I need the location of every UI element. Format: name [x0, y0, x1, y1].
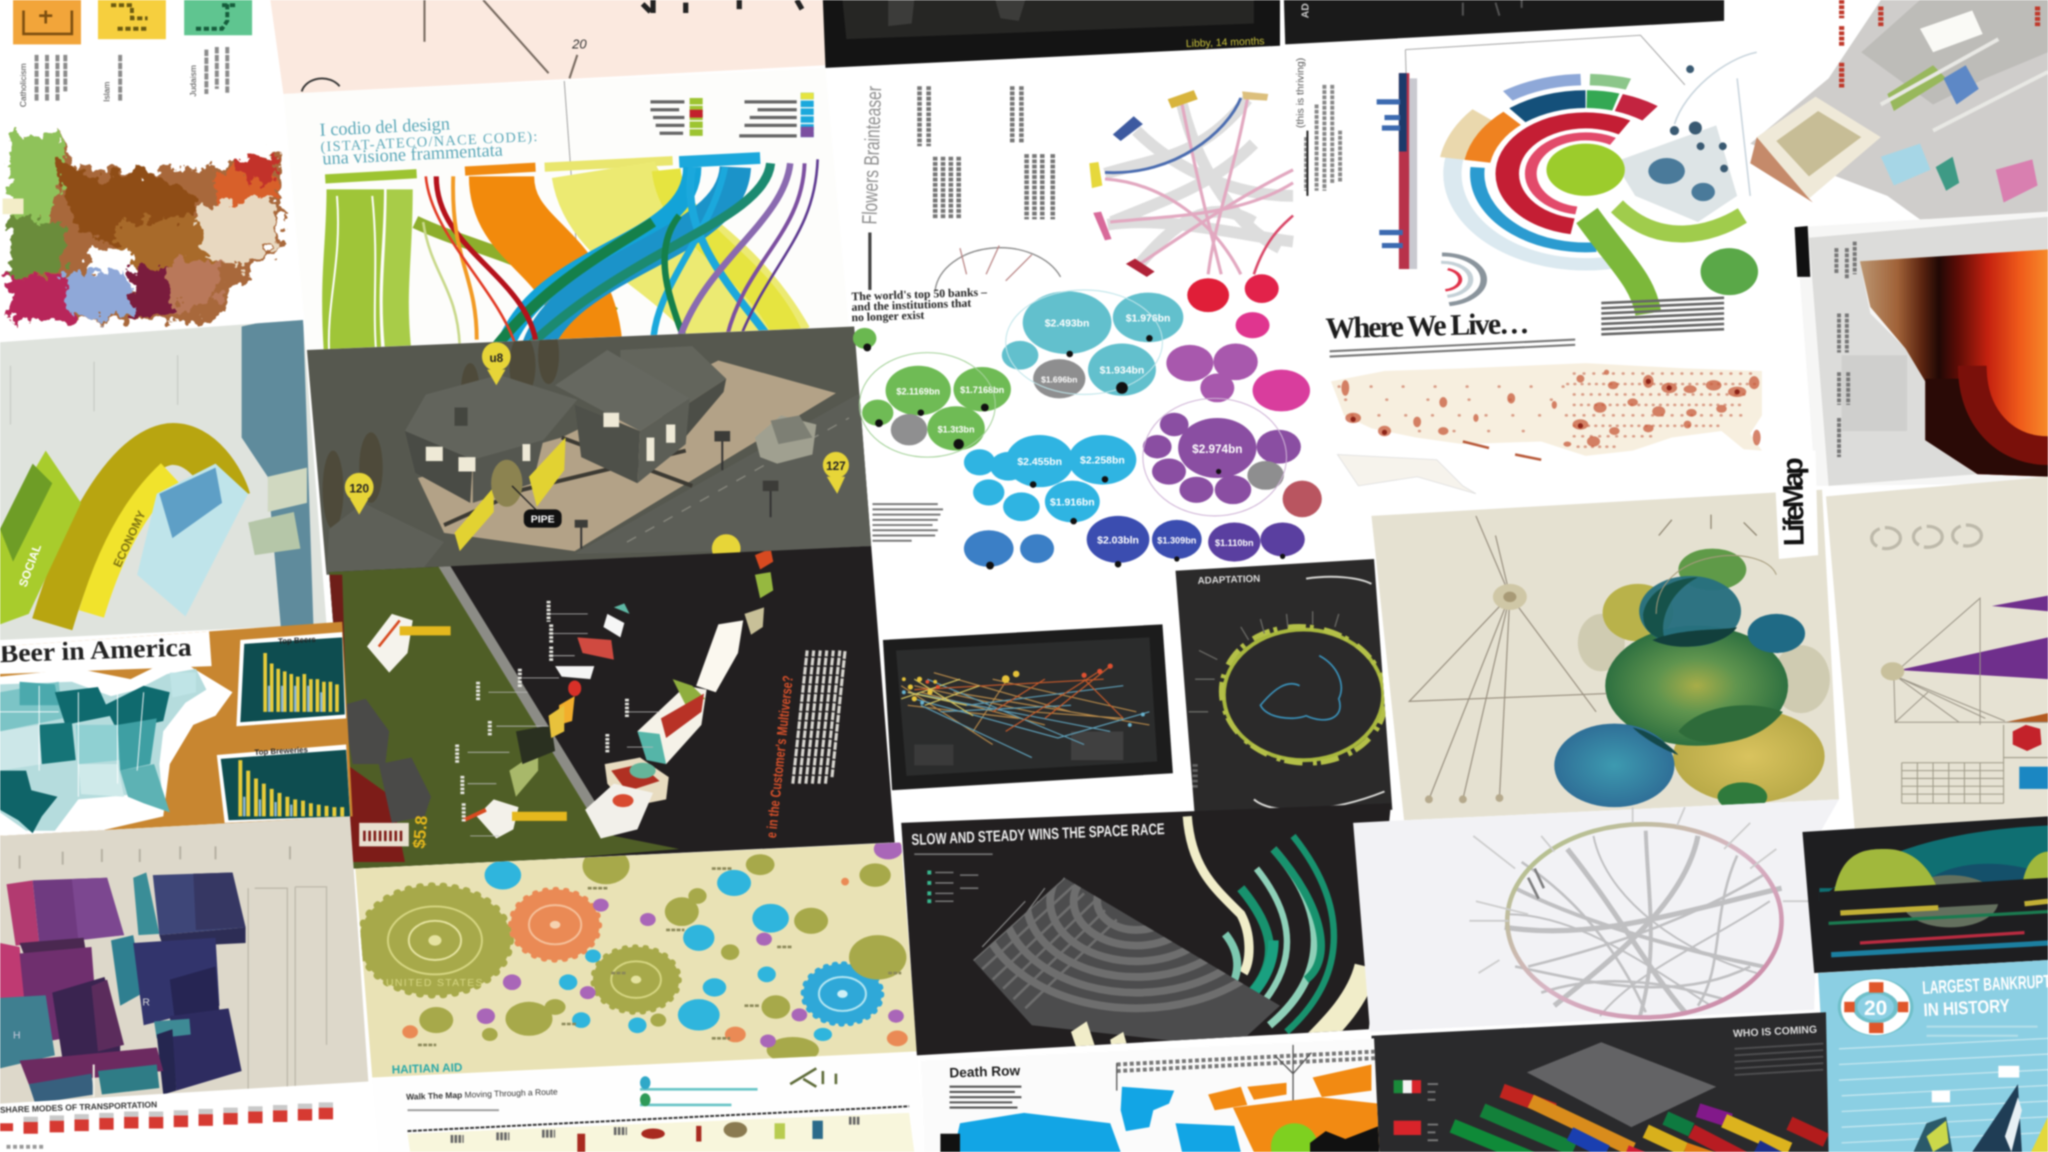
teal sliver — [133, 872, 159, 935]
panel: ADAPTATION radial — [1176, 559, 1394, 820]
title: (ISTAT-ATECO/NACE CODE): — [320, 129, 539, 155]
cyan cluster — [964, 435, 1136, 522]
panel: Space Race — [901, 794, 1391, 1055]
turquoise labels: $1.934bn — [1100, 366, 1144, 377]
legend bubble — [853, 328, 876, 349]
blue nodes — [1648, 158, 1715, 201]
deep blue labels: $2.03bln — [1097, 535, 1139, 546]
white box with yellow bar — [367, 614, 413, 673]
teal left — [0, 995, 55, 1068]
panel: dark chart domes — [1802, 816, 2048, 973]
panel: colour blotch US map — [3, 133, 281, 321]
chart grid — [1839, 1038, 2048, 1143]
green labels: $1.3t3bn — [938, 424, 975, 434]
satellite lines — [1659, 515, 1757, 536]
purple bubbles — [477, 839, 904, 1048]
lime hub — [1546, 144, 1625, 196]
heading: SLOW AND STEADY WINS THE SPACE RACE — [911, 821, 1165, 849]
white tower — [696, 620, 743, 692]
main green bubble — [1605, 626, 1788, 746]
orange regions — [1208, 1064, 1379, 1152]
panel: Haitian Aid bubbles — [355, 839, 917, 1078]
panel: chord circle — [1353, 799, 1839, 1032]
Texas — [0, 771, 57, 833]
pin: 120 — [345, 473, 374, 515]
grey road — [438, 566, 596, 809]
road — [860, 404, 861, 411]
panel: second black tile: AD — [1301, 3, 1312, 18]
green dome — [1834, 849, 1938, 893]
yellow arrows — [529, 438, 566, 507]
left text block — [950, 1087, 1021, 1108]
life ring icon: 20 — [1864, 997, 1887, 1020]
gold bubble lower — [1673, 709, 1825, 803]
rail — [408, 1106, 909, 1131]
text box — [1601, 298, 1724, 334]
heading: HAITIAN AID — [391, 1061, 463, 1077]
pale blue wave — [137, 464, 248, 616]
grey dome — [1902, 875, 1998, 927]
grid — [1902, 725, 2048, 803]
green flows — [1587, 206, 1742, 313]
heading: world's top banks: The world's top 50 banks – — [851, 286, 987, 303]
cyan labels: $2.258bn — [1080, 456, 1125, 467]
lower white cylinder with yellow bar — [477, 799, 519, 839]
heading: world's top banks — [851, 286, 987, 324]
panel: right beige tile with purple cone — [1826, 477, 2048, 829]
fan rings — [1393, 43, 1778, 304]
green cluster — [862, 366, 1011, 451]
large olive scallop — [359, 886, 511, 995]
panel: city of marketing blocks — [329, 546, 895, 875]
black skyline — [1310, 1126, 1379, 1152]
turquoise labels: $1.976bn — [1126, 313, 1170, 324]
tile outline — [1405, 35, 1685, 268]
green circle — [1271, 1123, 1318, 1152]
pin: 120: 120 — [349, 482, 369, 495]
cover — [1819, 878, 2048, 914]
grey stripes — [967, 794, 1293, 1051]
label: PIPE: PIPE — [531, 514, 555, 525]
trees — [323, 327, 559, 529]
blue square — [2019, 767, 2048, 789]
panel: top breweries: Top Breweries — [254, 745, 309, 757]
swirls — [1872, 525, 1981, 549]
items — [577, 1121, 823, 1152]
teal dome — [1819, 825, 2048, 901]
label: LifeMap: LifeMap — [1777, 457, 1811, 546]
intro copy — [1330, 340, 1575, 357]
panel: life stream yellow wave: SOCIAL — [17, 543, 44, 589]
title: Death Row — [949, 1063, 1021, 1081]
red green base — [605, 758, 669, 807]
cluster rings — [859, 290, 1287, 516]
states — [0, 682, 63, 731]
grey rays — [982, 878, 1064, 953]
pin: 127 — [823, 452, 849, 494]
green labels: $1.7168bn — [960, 385, 1005, 395]
blue scallop — [803, 964, 882, 1024]
house front — [405, 375, 577, 503]
panel: Beer in America: Beer in America — [0, 633, 192, 668]
large olive scallop: UNITED STATES — [386, 978, 484, 989]
white block base — [585, 784, 653, 839]
turquoise labels: $2.493bn — [1045, 319, 1089, 330]
pencils — [1452, 1091, 1826, 1152]
panel: Beer in America — [0, 622, 353, 836]
green labels: $2.1169bn — [896, 386, 940, 396]
shadows — [1578, 614, 1830, 713]
signs — [581, 438, 771, 549]
green dome — [1701, 248, 1758, 295]
green wave — [0, 451, 81, 624]
small chart rule — [869, 232, 871, 290]
cyan labels — [1017, 456, 1125, 508]
panel: transport mode cups — [0, 1099, 333, 1147]
panel: top beers — [236, 632, 346, 726]
panel: purple 3D blocks: H — [13, 1030, 21, 1041]
gold wave — [52, 444, 230, 624]
green labels — [896, 385, 1005, 434]
rim ticks — [1469, 807, 1809, 973]
pin: u8: u8 — [489, 352, 504, 365]
panel: black tile with caption — [823, 0, 1280, 68]
ships — [1972, 1084, 2022, 1152]
deep blue labels — [1097, 535, 1254, 548]
white map blob — [0, 664, 232, 836]
red hexagon — [2013, 725, 2041, 751]
legend — [927, 872, 931, 901]
panel: where we live with arc chart — [1296, 35, 1778, 494]
house lower left — [327, 503, 444, 575]
right blue bubble — [1748, 614, 1805, 653]
panel: top beers: Top Beers — [278, 635, 317, 646]
house middle — [555, 350, 690, 483]
blue inner path — [1260, 656, 1341, 720]
green field — [329, 562, 679, 875]
chord bars — [1089, 90, 1268, 277]
panel: who is coming — [1371, 1012, 1829, 1152]
panel: largest bankruptcies: IN HISTORY — [1923, 995, 2010, 1020]
panel: world's top banks bubbles — [851, 86, 1322, 569]
indigo blocks — [111, 935, 144, 1006]
small glyphs: R — [142, 998, 150, 1009]
pipe area — [491, 460, 522, 507]
title — [319, 109, 540, 169]
small green bubble — [1718, 782, 1767, 811]
purple dark — [52, 977, 120, 1061]
captions — [418, 869, 901, 1045]
left gold bubble — [1603, 584, 1673, 641]
turquoise labels — [1041, 313, 1170, 385]
overlap lens — [1678, 705, 1783, 743]
state outlines — [0, 686, 144, 797]
sketch lines — [1894, 598, 2048, 725]
cyan labels: $1.916bn — [1050, 497, 1095, 508]
US base — [0, 669, 206, 831]
panel: peach sketch tile — [270, 0, 825, 94]
small arc chart — [1400, 254, 1484, 305]
body copy — [793, 650, 845, 784]
top green bubble — [1678, 549, 1746, 590]
chord diagram — [1105, 98, 1293, 274]
sandy ground — [418, 360, 836, 551]
outer white arcs — [1254, 577, 1384, 810]
chords — [1505, 831, 1782, 1019]
panel: peach sketch tile: 20 — [571, 36, 587, 51]
central tower — [637, 679, 707, 764]
heading: ADAPTATION — [1197, 574, 1260, 587]
scale lines — [20, 846, 290, 869]
blue bubbles — [485, 861, 832, 1041]
block back right — [153, 872, 246, 935]
rotated heading: e in the Customer's Multiverse? — [764, 675, 797, 839]
small items — [568, 680, 581, 696]
label: LifeMap — [1774, 451, 1818, 559]
teal arcs — [1225, 836, 1334, 1032]
label: PIPE — [524, 509, 562, 528]
cyan labels: $2.455bn — [1017, 457, 1062, 468]
red buildings — [328, 574, 346, 670]
shadow band — [20, 938, 86, 960]
pin: partial — [710, 533, 742, 554]
cream notches — [1071, 1021, 1095, 1055]
purple cone — [1899, 637, 2048, 679]
deep blue labels: $1.110bn — [1215, 538, 1254, 548]
panel: top breweries — [217, 744, 350, 823]
legend swatches — [650, 93, 807, 137]
left text note — [872, 504, 943, 541]
pin: u8 — [482, 342, 511, 385]
bars — [1840, 908, 1938, 913]
panel: heat stack chart — [1795, 212, 2048, 490]
population map — [1331, 363, 1762, 494]
node clusters — [901, 666, 1149, 758]
panel: second black tile — [1284, 0, 1724, 44]
olive bubbles — [419, 848, 906, 1063]
arc of flower pins — [935, 246, 1061, 290]
body lines — [1735, 1044, 1823, 1075]
panel: isometric houses — [307, 327, 875, 575]
heading: world's top banks: no longer exist — [851, 309, 925, 324]
heading: Where We Live… — [1325, 307, 1530, 345]
panel: largest bankruptcies — [1818, 960, 2048, 1152]
panel: purple 3D blocks — [0, 816, 368, 1104]
panel: life stream yellow wave — [0, 313, 327, 640]
cracker stack — [509, 751, 538, 797]
grey slab — [1527, 1042, 1716, 1127]
bottom teal — [29, 1074, 94, 1104]
heading: WHO IS COMING — [1733, 1025, 1817, 1040]
panel: Sankey chart of design codes — [319, 80, 820, 350]
heading: Flowers Brainteaser: Flowers Brainteaser — [858, 86, 886, 225]
flags — [1394, 1080, 1421, 1093]
yellow figure: $5.8 — [410, 815, 431, 849]
panel: isometric city top right — [1750, 0, 2048, 219]
cream arcs — [1187, 816, 1366, 1045]
heading: Walk The Map Moving Through a Route — [406, 1086, 558, 1102]
caption: Libby, 14 months — [1186, 36, 1265, 50]
block back left — [7, 880, 39, 946]
bottom right — [170, 1008, 242, 1091]
black dots — [863, 335, 1285, 569]
panel: network tile — [883, 624, 1173, 790]
node and lines — [1409, 516, 1607, 799]
panel: life stream yellow wave: ECONOMY — [111, 509, 149, 569]
isometric boxes — [268, 468, 307, 512]
turquoise cluster — [1002, 291, 1183, 396]
title: una visione frammentata — [322, 140, 503, 168]
flow bands — [325, 81, 818, 353]
dark purple cluster — [1143, 413, 1301, 504]
grey wedge — [1614, 125, 1737, 222]
panel: Death Row map — [921, 1038, 1379, 1152]
orange scallop — [511, 889, 600, 960]
pin: 127: 127 — [826, 460, 846, 473]
panel: religion grid squares: Judaism — [188, 65, 198, 97]
top blue bubble — [1639, 576, 1741, 647]
red and pink — [1187, 274, 1279, 338]
ring — [1507, 824, 1782, 1017]
rotated page text: (this is thriving) — [1296, 58, 1307, 128]
body text columns — [920, 86, 1053, 219]
bike drawing — [790, 1068, 836, 1087]
orange bubbles — [402, 878, 908, 1046]
house back — [620, 346, 727, 436]
maroon band — [20, 1048, 163, 1084]
spokes — [1189, 611, 1339, 712]
panel: religion grid squares: Catholicism — [18, 63, 28, 107]
purple label: $2.974bn — [1192, 443, 1242, 456]
heading: world's top banks: and the institutions that — [851, 297, 972, 314]
teal coastline — [242, 313, 313, 627]
purple and magenta cluster — [1166, 344, 1310, 411]
blue lower bubble — [1554, 724, 1674, 807]
panel: transport mode cups: SHARE MODES OF TRANSPORTATION — [0, 1099, 157, 1115]
banner title — [0, 630, 212, 674]
car — [755, 415, 816, 464]
title: I codio del design — [319, 113, 450, 140]
panel: religion grid squares: Islam — [102, 82, 112, 102]
olive scallop — [593, 947, 679, 1012]
tick labels — [468, 614, 660, 836]
deep blue labels: $1.309bn — [1157, 535, 1197, 545]
deep blue cluster — [964, 516, 1305, 567]
green ring — [1224, 630, 1383, 760]
legend icons — [640, 1089, 758, 1105]
pink mid block — [0, 943, 29, 1051]
blue regions — [953, 1087, 1241, 1152]
life ring icon — [1838, 978, 1913, 1036]
population bar spine — [1377, 73, 1417, 269]
hawaii and alaska — [1337, 455, 1476, 494]
panel: religion grid squares — [13, 0, 252, 107]
panel: walk the map timeline — [372, 1053, 925, 1152]
panel: LifeMap bubbles — [1371, 490, 1839, 820]
turquoise labels: $1.696bn — [1041, 375, 1077, 385]
